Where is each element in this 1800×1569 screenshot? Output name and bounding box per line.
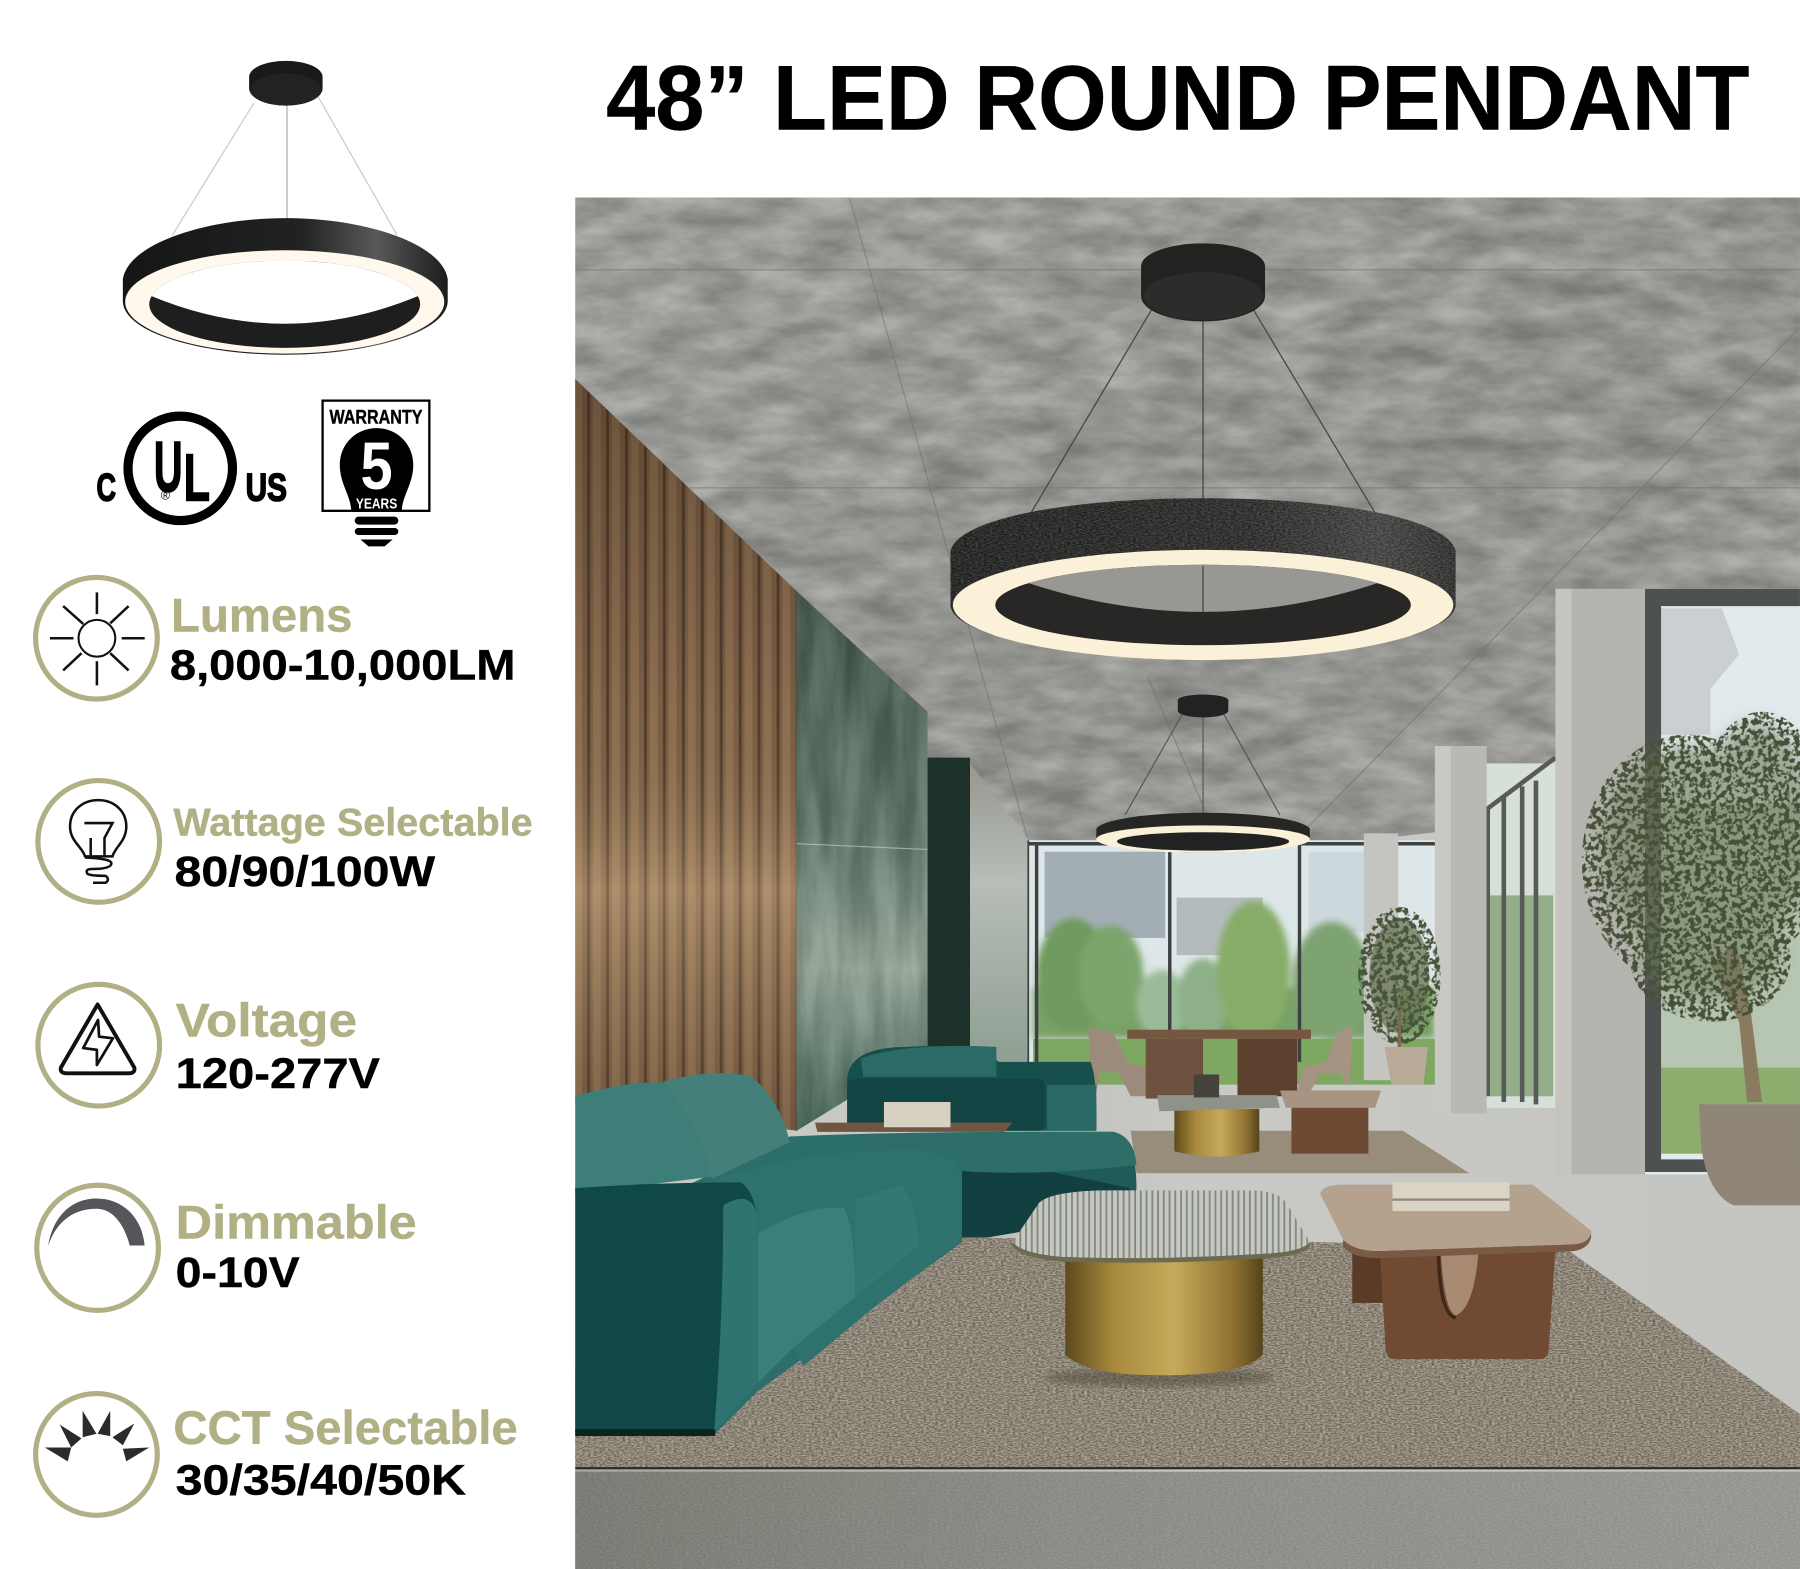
spec: voltage: 120-277V xyxy=(176,1050,381,1097)
marble and walnut side table xyxy=(1320,1182,1591,1359)
spec: CCT: 30/35/40/50K xyxy=(176,1457,466,1504)
spec: wattage: 80/90/100W xyxy=(175,848,436,895)
spec: dimmable xyxy=(37,1185,417,1310)
5 year warranty badge: WARRANTY xyxy=(329,407,422,429)
cUL US certification mark: US xyxy=(246,467,287,510)
5 year warranty badge: 5 xyxy=(360,430,393,504)
main rug xyxy=(575,1234,1800,1475)
sofa base xyxy=(689,1136,962,1435)
front arm xyxy=(575,1182,758,1433)
icon: light bulb xyxy=(38,781,160,902)
icon: colour temperature rays xyxy=(36,1394,157,1515)
spec: dimmable: 0-10V xyxy=(176,1249,300,1296)
spec: CCT xyxy=(36,1394,518,1515)
main ceiling pendant xyxy=(951,243,1456,660)
5 year warranty badge xyxy=(323,401,429,546)
far tables xyxy=(1157,1074,1381,1157)
spec: dimmable: Dimmable xyxy=(176,1196,417,1249)
large olive tree xyxy=(1582,712,1800,1205)
seats xyxy=(800,1282,906,1366)
wood slat wall xyxy=(575,379,797,1131)
spec: lumens: 8,000-10,000LM xyxy=(170,642,515,689)
5 year warranty badge: YEARS xyxy=(356,496,397,513)
spec: CCT: CCT Selectable xyxy=(173,1401,518,1454)
back window view xyxy=(1027,840,1441,1087)
green marble wall xyxy=(797,591,1027,1131)
distant pendant xyxy=(1096,695,1310,853)
dining set xyxy=(1088,1025,1352,1099)
spec: wattage xyxy=(38,781,533,902)
title: 48” LED ROUND PENDANT xyxy=(606,48,1749,150)
icon: voltage triangle xyxy=(38,984,160,1106)
cUL US certification mark: U xyxy=(154,428,183,507)
spec: voltage: Voltage xyxy=(176,994,357,1047)
spec: wattage: Wattage Selectable xyxy=(173,802,533,845)
ribbed brass coffee table xyxy=(1012,1190,1310,1387)
spec: lumens: Lumens xyxy=(171,588,352,641)
teal sofa xyxy=(575,1046,1136,1436)
columns and right windows xyxy=(1364,589,1800,1174)
cUL US certification mark: L xyxy=(184,442,210,516)
small potted tree xyxy=(1358,907,1441,1085)
lifestyle interior scene xyxy=(575,197,1800,1569)
cUL US certification mark xyxy=(96,416,287,521)
product image: pendant light xyxy=(123,61,448,355)
back rug xyxy=(1131,1131,1469,1173)
concrete ceiling xyxy=(575,197,1800,852)
icon: sun xyxy=(36,577,157,699)
spec: lumens xyxy=(36,577,515,699)
chaise xyxy=(966,1132,1136,1238)
floor xyxy=(575,1084,1435,1569)
icon: dimmer arc xyxy=(37,1185,158,1310)
spec: voltage xyxy=(38,984,381,1106)
cUL US certification mark: C xyxy=(96,467,116,510)
back cushions xyxy=(575,1082,712,1194)
cUL US certification mark: ® xyxy=(161,488,171,502)
foreground concrete floor xyxy=(575,1471,1800,1569)
rear sofa xyxy=(847,1046,1096,1131)
